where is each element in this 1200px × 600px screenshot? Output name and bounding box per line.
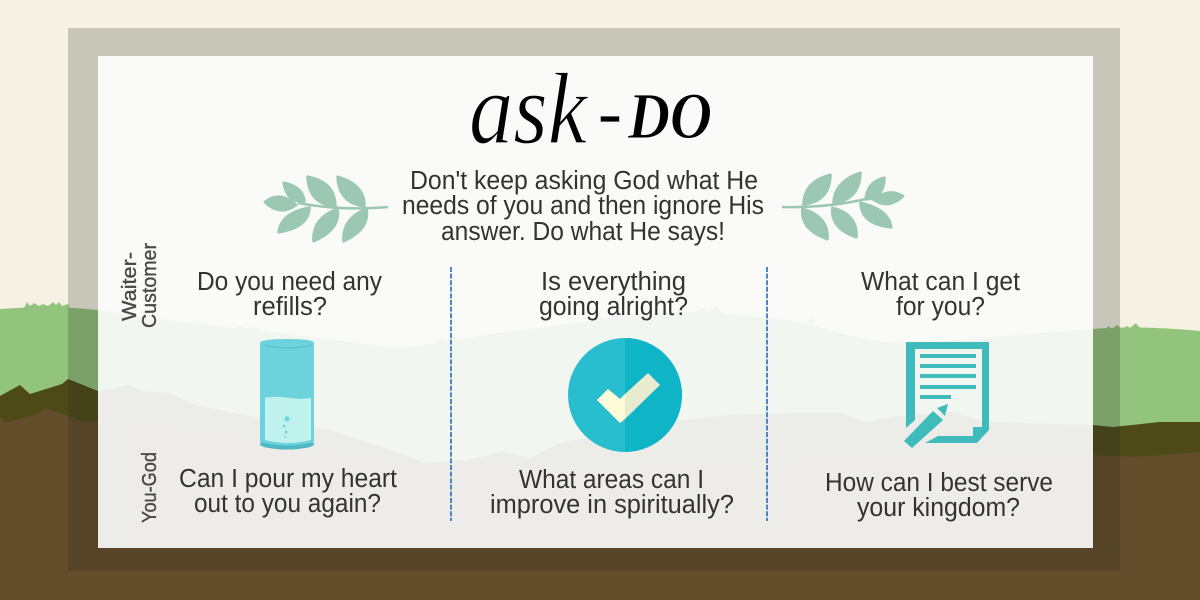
title: ask xyxy=(469,53,588,166)
side label: You-God: You-God xyxy=(139,452,161,523)
question: get for you: What can I get xyxy=(861,268,1020,296)
title: DO xyxy=(627,80,712,153)
right leaf branch xyxy=(782,172,904,240)
question: get for you: for you? xyxy=(896,293,985,321)
question: going alright: Is everything xyxy=(541,268,686,296)
side label: Waiter-Customer: Customer xyxy=(139,243,161,328)
icon: glass of water xyxy=(260,339,314,450)
white content panel xyxy=(98,56,1093,548)
dividers xyxy=(451,267,767,521)
translucent frame band xyxy=(68,28,1120,571)
question: going alright xyxy=(539,268,688,321)
subtitle: Don't keep asking God what He xyxy=(410,167,758,195)
question: refills: Do you need any xyxy=(197,268,382,296)
icon: document and pencil xyxy=(904,342,989,448)
question: pour my heart xyxy=(179,465,397,518)
subtitle: answer. Do what He says! xyxy=(441,218,725,246)
question: serve your kingdom: your kingdom? xyxy=(857,494,1020,522)
question: refills xyxy=(197,268,382,321)
question: pour my heart: Can I pour my heart xyxy=(179,465,397,493)
icon: check circle xyxy=(568,338,682,452)
side label: Waiter-Customer: Waiter- xyxy=(119,252,141,321)
question: improve spiritually: improve in spiritually? xyxy=(490,491,734,519)
question: serve your kingdom xyxy=(825,469,1053,522)
title: - xyxy=(597,87,623,143)
subtitle: needs of you and then ignore His xyxy=(402,192,764,220)
question: refills: refills? xyxy=(253,293,327,321)
question: improve spiritually: What areas can I xyxy=(519,466,704,494)
side label: Waiter-Customer xyxy=(119,243,161,328)
subtitle xyxy=(402,167,764,246)
question: get for you xyxy=(861,268,1020,321)
question: pour my heart: out to you again? xyxy=(194,490,381,518)
left leaf branch xyxy=(264,176,388,242)
question: serve your kingdom: How can I best serve xyxy=(825,469,1053,497)
question: going alright: going alright? xyxy=(539,293,688,321)
title xyxy=(469,53,712,166)
question: improve spiritually xyxy=(490,466,734,519)
